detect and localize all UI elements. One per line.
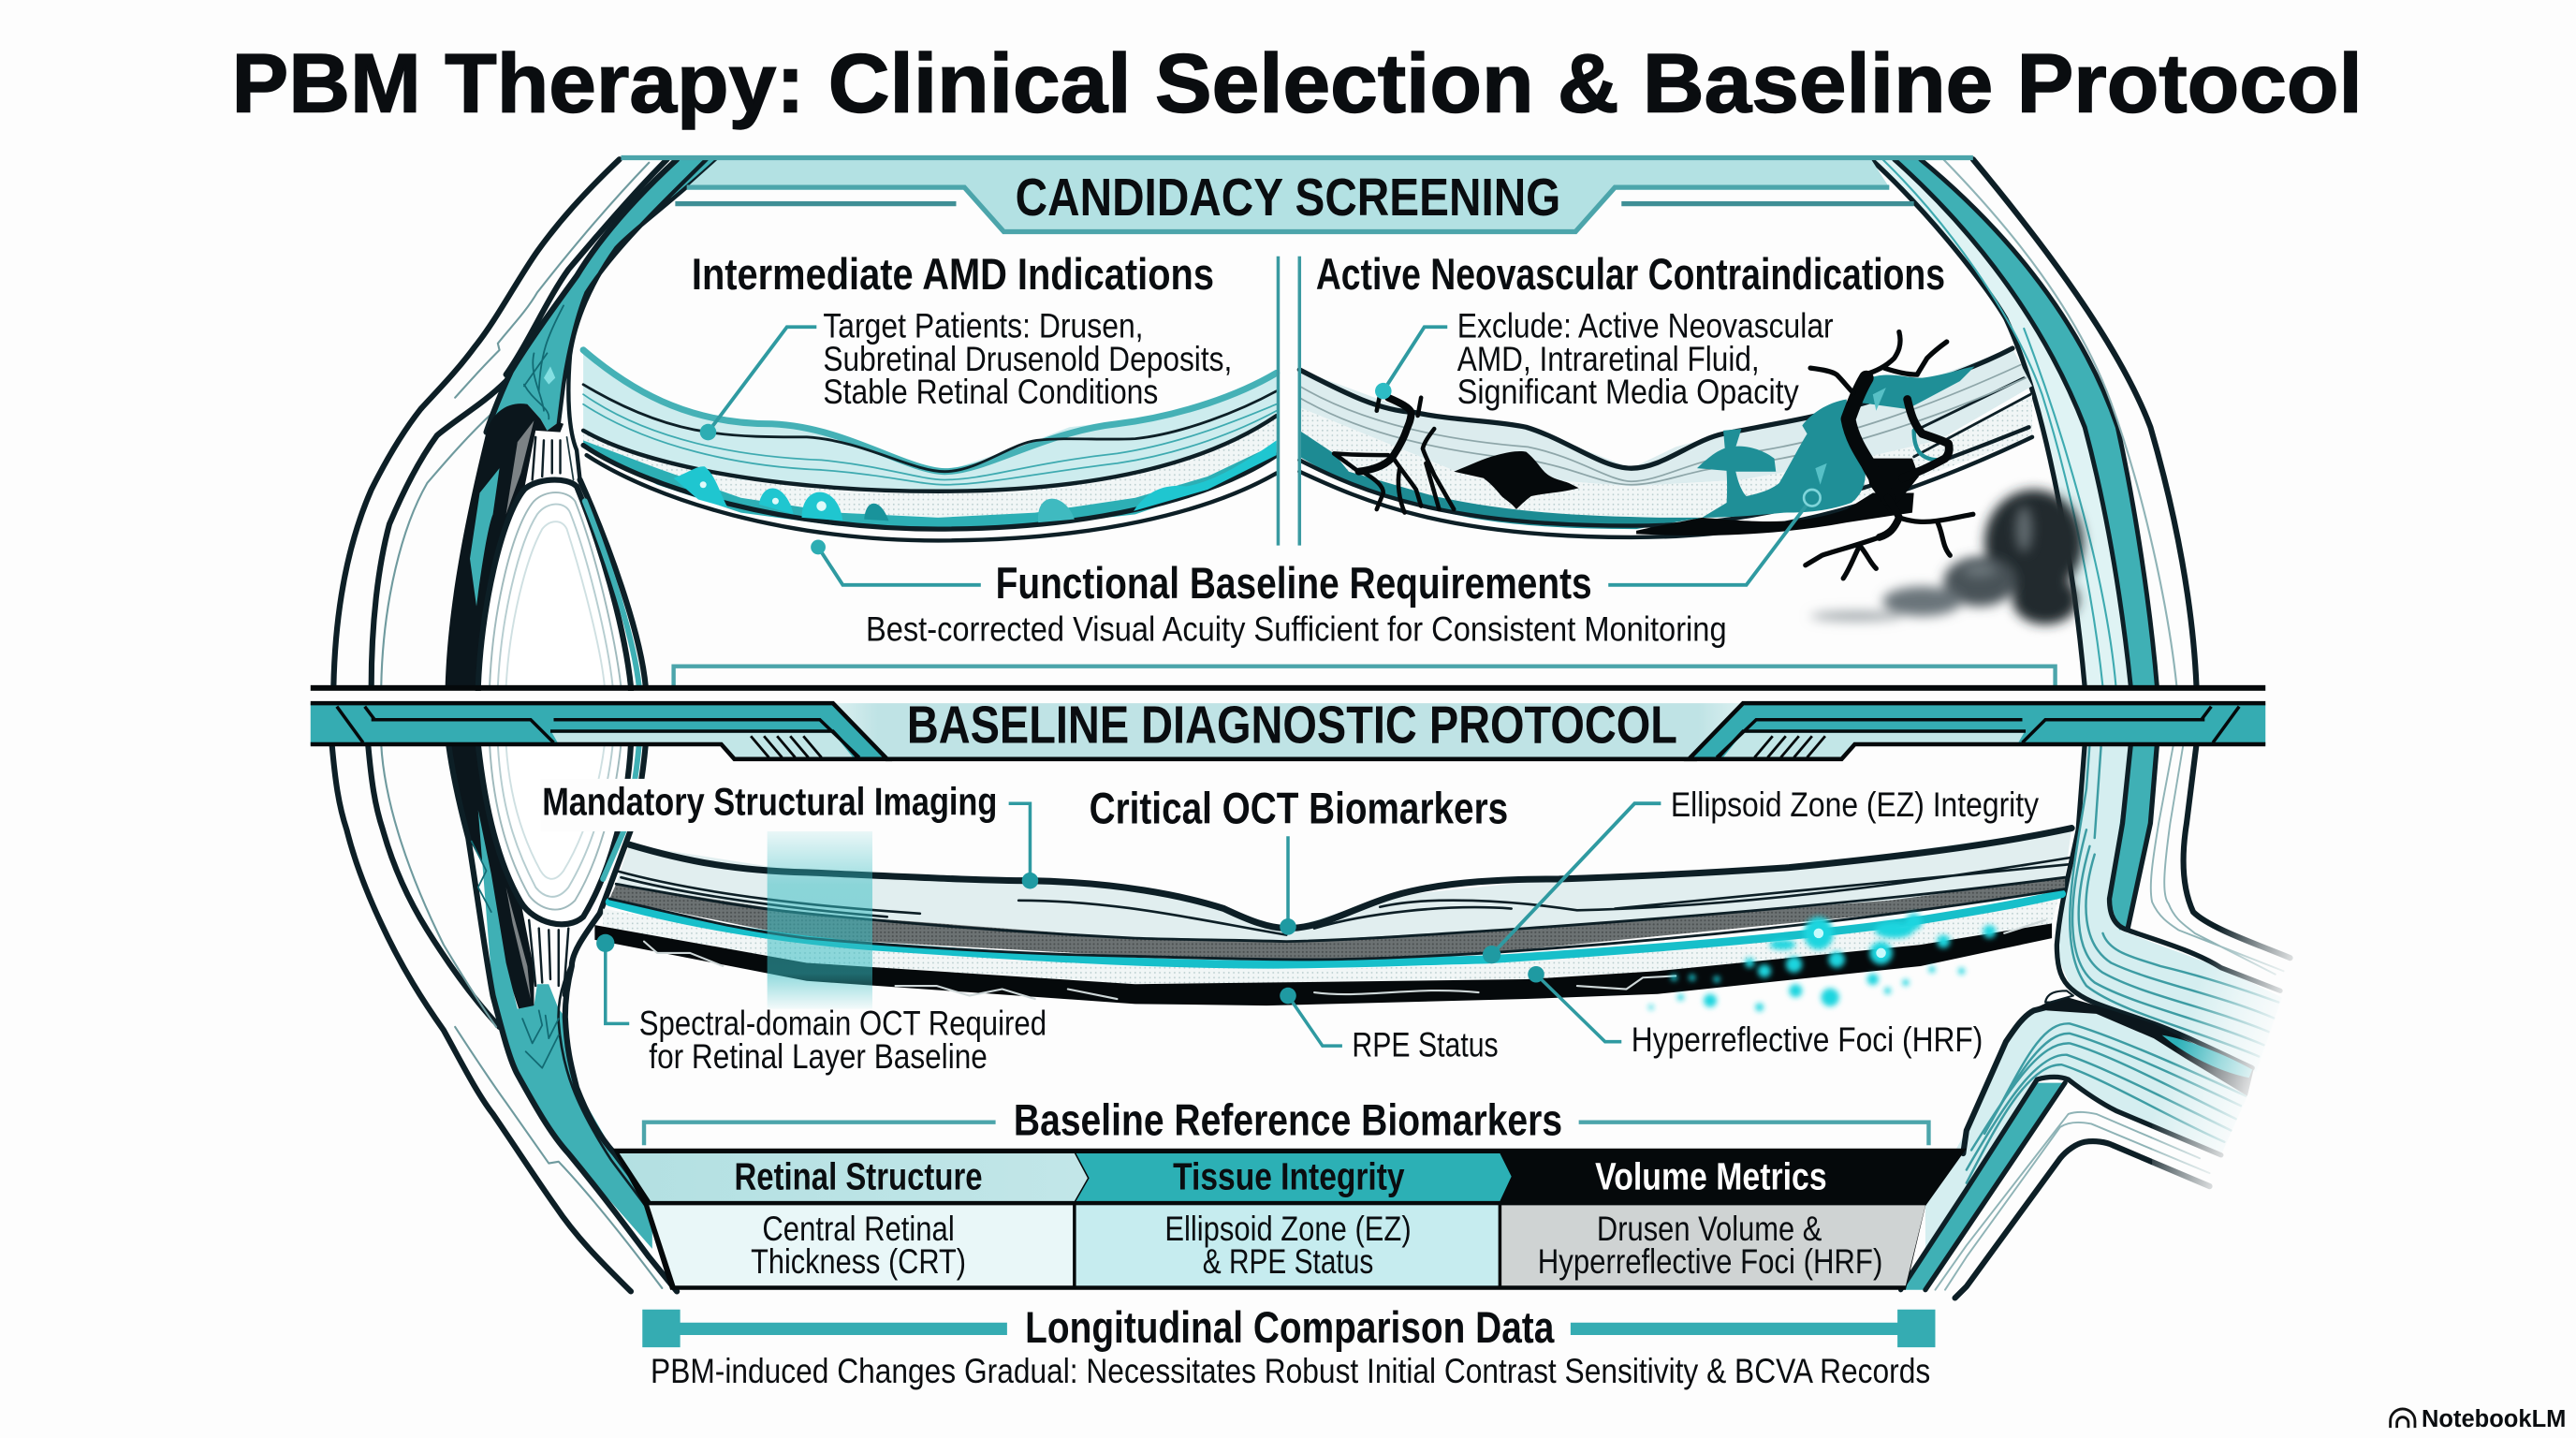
description: Target Patients: Drusen, xyxy=(823,307,1144,345)
callout: spectral-domain OCT: Spectral-domain OCT Required xyxy=(639,1005,1046,1043)
description: AMD, Intraretinal Fluid, xyxy=(1457,340,1760,378)
lens right rim xyxy=(580,479,646,914)
callout: spectral-domain OCT: for Retinal Layer Baseline xyxy=(649,1037,988,1076)
callout: mandatory imaging leader xyxy=(1009,803,1038,888)
description xyxy=(1457,307,1834,411)
callout: hyperreflective foci xyxy=(1528,966,1983,1059)
heading: critical OCT biomarkers: Critical OCT Biomarkers xyxy=(1090,784,1508,833)
light layers xyxy=(616,829,2071,942)
optic nerve upper bundle xyxy=(2070,744,2278,1056)
heading: Intermediate AMD Indications xyxy=(692,250,1214,300)
column: volume metrics xyxy=(1501,1155,1925,1285)
heading: CANDIDACY SCREENING xyxy=(1016,168,1560,227)
callout: RPE status xyxy=(1280,988,1499,1064)
callout: drusen leader xyxy=(700,327,816,440)
column: retinal structure: Retinal Structure xyxy=(735,1155,983,1198)
cyan line xyxy=(609,894,2062,964)
iris and choroid lower xyxy=(448,744,534,1016)
sclera right lower xyxy=(2056,744,2291,1084)
retina cross-section: OCT xyxy=(594,829,2071,1011)
nerve cap xyxy=(2045,990,2073,1003)
callout: functional right leader xyxy=(1608,490,1821,585)
column: volume metrics: Hyperreflective Foci (HRF) xyxy=(1538,1242,1882,1281)
disrupted layers xyxy=(1299,348,2032,486)
band gap xyxy=(311,691,2265,702)
column: volume metrics: Volume Metrics xyxy=(1595,1155,1827,1198)
retina section: active neovascular xyxy=(1299,332,2032,579)
callout: foveal leader xyxy=(1280,836,1296,935)
heading: Mandatory Structural Imaging xyxy=(542,779,997,823)
table frame xyxy=(613,1149,1967,1290)
stipple layer xyxy=(603,897,2058,984)
eye anatomy illustration xyxy=(332,159,2365,1298)
heading: Longitudinal Comparison Data xyxy=(1025,1303,1555,1353)
heading: Active Neovascular Contraindications xyxy=(1316,250,1945,300)
description: PBM-induced Changes Gradual: Necessitates Robust Initial Contrast Sensitivity & BCVA Records xyxy=(651,1352,1930,1390)
retina section: intermediate AMD xyxy=(583,350,1277,540)
dark teal RPE xyxy=(1299,431,1702,529)
block: active neovascular contraindications xyxy=(1316,250,1945,411)
column: tissue integrity: Ellipsoid Zone (EZ) xyxy=(1164,1210,1412,1248)
column: retinal structure: Thickness (CRT) xyxy=(751,1242,966,1281)
column: tissue integrity: & RPE Status xyxy=(1203,1242,1373,1281)
description: Subretinal Drusenold Deposits, xyxy=(823,340,1232,378)
stipple layer xyxy=(583,416,1277,518)
column: retinal structure: Central Retinal xyxy=(762,1210,955,1248)
description: Best-corrected Visual Acuity Sufficient for Consistent Monitoring xyxy=(866,609,1727,648)
teal fluid xyxy=(1697,366,1975,518)
heading: baseline reference biomarkers xyxy=(644,1096,1928,1146)
biomarker table xyxy=(613,1149,1967,1290)
choroid band upper left xyxy=(470,159,718,607)
right end cap and bar xyxy=(1571,1310,1935,1347)
callout: hyperreflective foci: Hyperreflective Foci (HRF) xyxy=(1632,1020,1983,1059)
optic nerve fade xyxy=(2152,920,2365,1232)
callout: neovascular leader xyxy=(1375,327,1447,399)
title: PBM Therapy: Clinical Selection & Baseline Protocol xyxy=(232,36,2363,129)
right tech ornament xyxy=(1689,703,2265,759)
optic nerve dark core xyxy=(2037,996,2254,1096)
column: tissue integrity xyxy=(1076,1153,1512,1285)
divider between indications and contraindications xyxy=(1278,257,1299,546)
teal RPE layer xyxy=(583,440,1277,529)
optic nerve lower bundle xyxy=(1901,990,2254,1298)
OCT scan beam xyxy=(768,831,872,1009)
neovascular branches xyxy=(1334,332,1973,579)
hyperreflective foci xyxy=(1648,914,1996,1011)
column: retinal structure xyxy=(620,1153,1088,1285)
left end cap and bar xyxy=(642,1310,1007,1347)
center plate xyxy=(822,703,1754,759)
heading: baseline reference biomarkers: Baseline Reference Biomarkers xyxy=(1014,1096,1562,1146)
gray layer xyxy=(609,877,2065,960)
iris and pupil upper xyxy=(446,404,564,687)
callout: RPE status: RPE Status xyxy=(1352,1025,1499,1064)
block: intermediate AMD indications xyxy=(692,250,1232,411)
callout: functional left leader xyxy=(811,540,981,585)
callout: ellipsoid zone: Ellipsoid Zone (EZ) Integrity xyxy=(1671,785,2040,824)
NotebookLM logo: NotebookLM xyxy=(2422,1404,2566,1432)
banner: baseline diagnostic protocol xyxy=(311,695,2265,759)
sclera right upper xyxy=(1871,159,2130,687)
drusen deposits xyxy=(674,440,1277,522)
callout: spectral-domain OCT xyxy=(596,934,1046,1076)
heading: Functional Baseline Requirements xyxy=(996,559,1592,609)
block: mandatory structural imaging xyxy=(540,779,1003,831)
black lesion xyxy=(1454,451,1579,509)
description xyxy=(823,307,1232,411)
section frame xyxy=(674,667,2056,687)
block: functional baseline requirements xyxy=(866,559,1727,648)
block: longitudinal comparison data xyxy=(642,1303,1935,1390)
banner: candidacy screening xyxy=(621,157,1973,231)
description: Exclude: Active Neovascular xyxy=(1457,307,1834,345)
sclera left xyxy=(332,159,667,1291)
lens xyxy=(478,480,631,924)
column: volume metrics: Drusen Volume & xyxy=(1597,1210,1822,1248)
description: Significant Media Opacity xyxy=(1457,373,1799,411)
description: Stable Retinal Conditions xyxy=(823,373,1158,411)
left tech ornament xyxy=(311,703,887,759)
inner retinal layers xyxy=(583,350,1277,492)
band top rule xyxy=(311,685,2265,691)
stipple layer xyxy=(1299,394,2032,526)
column: tissue integrity: Tissue Integrity xyxy=(1173,1155,1405,1198)
heading: BASELINE DIAGNOSTIC PROTOCOL xyxy=(907,695,1677,754)
callout: ellipsoid zone xyxy=(1483,785,2040,963)
media opacity smoke cloud xyxy=(1810,490,2083,624)
choroid layer xyxy=(594,923,2052,1005)
